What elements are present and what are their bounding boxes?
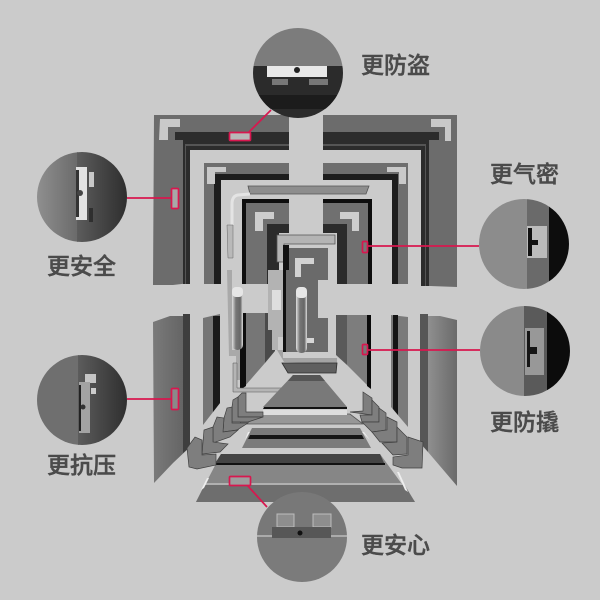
right handle xyxy=(296,287,307,353)
label: 更抗压: 更抗压 xyxy=(47,452,116,478)
third frame: right lower xyxy=(336,315,371,389)
second frame: right lower xyxy=(391,315,408,427)
floor thresholds and corner pieces xyxy=(187,375,423,502)
metal keep xyxy=(525,328,544,375)
label: 更防撬: 更防撬 xyxy=(490,409,559,435)
label: 更气密: 更气密 xyxy=(490,161,559,187)
upper door frames xyxy=(153,115,457,287)
zoom detail: top lock (更防盗) xyxy=(253,28,343,118)
left vertical strip xyxy=(232,194,250,225)
metal plate xyxy=(76,167,87,220)
outer frame: left lower xyxy=(153,314,190,483)
outer frame: right upper xyxy=(323,115,457,287)
zoom detail: left lower lock (更抗压) xyxy=(37,355,128,445)
third frame: right upper xyxy=(323,199,372,284)
left vertical lock piece xyxy=(227,225,233,258)
zoom detail: right upper keep (更气密) xyxy=(479,199,570,289)
third frame: left upper xyxy=(242,199,289,284)
third frame: left lower xyxy=(240,313,275,390)
second frame: left upper xyxy=(204,163,289,284)
leader: left upper xyxy=(127,188,178,208)
label: 更安心: 更安心 xyxy=(361,532,430,558)
label: 更安全: 更安全 xyxy=(47,253,116,279)
metal plate xyxy=(267,66,327,77)
red callout markers and leader lines xyxy=(127,110,480,507)
threshold: front xyxy=(196,454,415,502)
left handle xyxy=(232,287,243,350)
left hardware strip xyxy=(227,270,240,380)
leader: left lower xyxy=(127,388,178,410)
second frame: left lower xyxy=(203,314,220,425)
label: 更防盗: 更防盗 xyxy=(361,52,430,78)
metal keep xyxy=(527,226,547,258)
lower transmission pieces xyxy=(233,350,337,392)
hardware: espagnolette and central sash with handles xyxy=(227,186,369,424)
inner sash: upper bar xyxy=(277,235,335,262)
lower door frames xyxy=(153,313,457,486)
metal plate xyxy=(85,374,96,383)
leader: top xyxy=(230,110,271,140)
leader: right lower xyxy=(362,344,480,354)
outer frame: left upper xyxy=(153,115,289,285)
bottom transmission bar xyxy=(240,414,363,424)
leader: right upper xyxy=(362,242,479,252)
outer frame: right lower xyxy=(420,314,457,486)
inner sash C-shape panel xyxy=(283,245,328,352)
centre hardware strip xyxy=(268,270,283,350)
metal keep xyxy=(277,514,294,527)
second frame: right upper xyxy=(323,163,408,284)
zoom detail: left upper lock (更安全) xyxy=(37,152,127,242)
stair corners: left xyxy=(187,393,263,469)
stair corners: right xyxy=(350,392,423,468)
top transmission bar xyxy=(248,186,369,194)
leader: bottom xyxy=(230,476,267,507)
zoom detail: bottom keep (更安心) xyxy=(257,492,347,582)
threshold: back xyxy=(263,375,347,415)
zoom detail: right lower keep (更防撬) xyxy=(480,306,571,396)
threshold: middle xyxy=(242,428,371,448)
